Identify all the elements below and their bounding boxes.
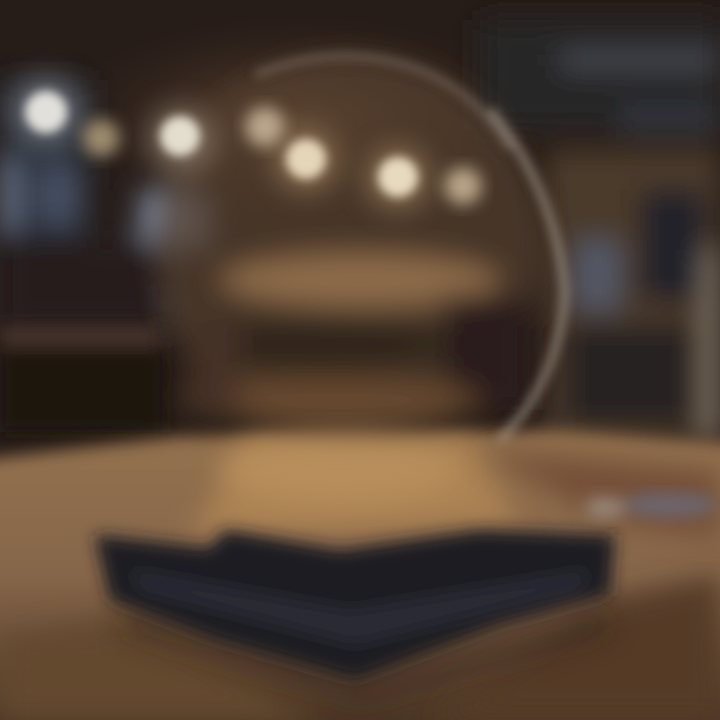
object: small items on the right of the table (585, 493, 718, 519)
illustration: glass globe (155, 55, 565, 502)
globe body (155, 55, 545, 445)
lights: row of glowing bulbs (10, 76, 482, 210)
panel: right shelves (480, 20, 720, 440)
background: warm wall glow (118, 42, 385, 160)
object: shadow below the book (120, 610, 615, 705)
panel: left windows (0, 80, 210, 330)
object: dark open book at the front (95, 530, 615, 680)
globe rim (255, 56, 565, 440)
globe base glow (220, 438, 460, 502)
floor: wooden table surface (0, 430, 720, 720)
panel: left dark table (0, 325, 165, 432)
